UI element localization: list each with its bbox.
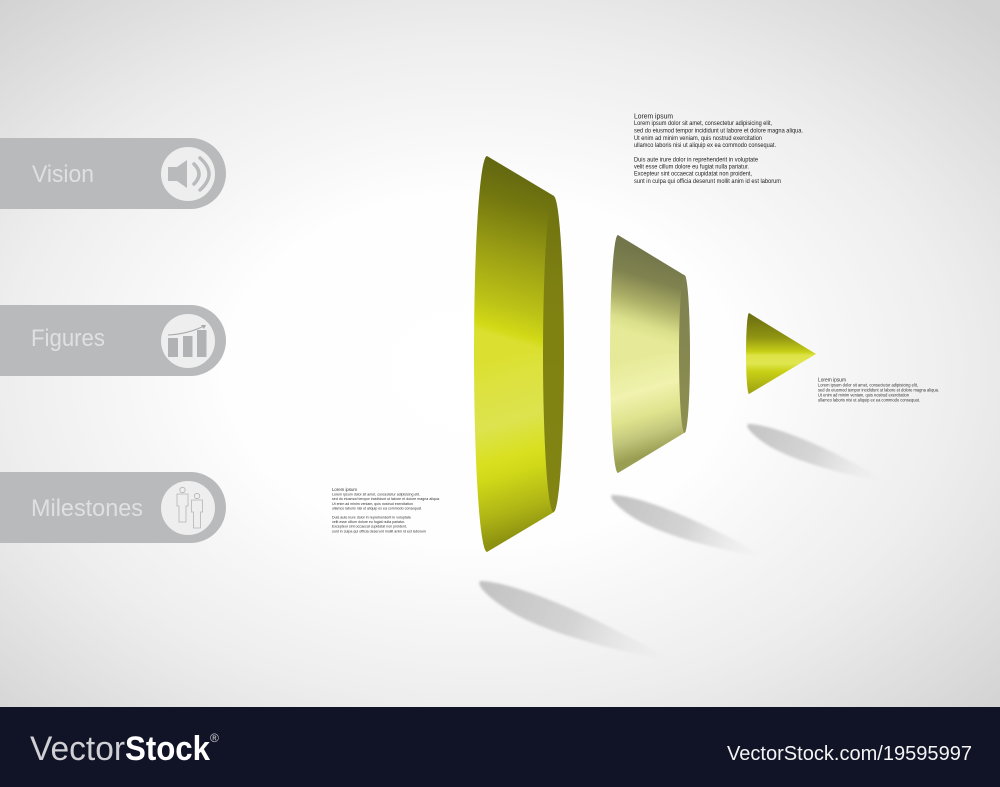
label: Vision: Vision <box>32 161 94 188</box>
text block: right: Lorem ipsum <box>818 378 846 384</box>
label: Vision <box>0 138 226 209</box>
icon: speaker <box>161 147 215 201</box>
text block: left: Lorem ipsum <box>332 487 357 492</box>
registered mark: ® <box>210 731 219 745</box>
label: Figures: Figures <box>31 325 105 352</box>
text block: right: Lorem ipsum dolor sit amet, consectetur adipisicing elit, <box>818 382 918 388</box>
footer banner <box>0 707 1000 787</box>
text block: top <box>634 114 803 185</box>
shadow: middle segment <box>611 495 767 558</box>
text block: left: Ut enim ad minim veniam, quis nostrud exercitation <box>332 501 413 506</box>
large cone segment <box>474 156 564 552</box>
label: Milestones: Milestones <box>31 495 143 522</box>
text block: top: Lorem ipsum dolor sit amet, consectetur adipisicing elit, <box>634 121 772 127</box>
text block: left: sed do eiusmod tempor incididunt ut labore et dolore magna aliqua. <box>332 496 440 501</box>
text block: right: Ut enim ad minim veniam, quis nostrud exercitation <box>818 392 910 398</box>
shadow: large segment <box>479 581 672 661</box>
text block: top: Lorem ipsum <box>634 114 673 120</box>
text block: left <box>332 487 440 534</box>
text block: right: sed do eiusmod tempor incididunt ut labore et dolore magna aliqua. <box>818 388 939 392</box>
middle cone segment <box>610 235 690 473</box>
text block: top: Excepteur sint occaecat cupidatat non proident, <box>634 172 752 178</box>
image id: VectorStock.com/19595997 <box>727 743 972 765</box>
text block: top: Ut enim ad minim veniam, quis nostrud exercitation <box>634 136 762 142</box>
text block: top: sunt in culpa qui officia deserunt mollit anim id est laborum <box>634 179 781 185</box>
text block: left: ullamco laboris nisi ut aliquip ex ea commodo consequat. <box>332 506 422 510</box>
text block: right <box>818 378 939 402</box>
text block: top: sed do eiusmod tempor incididunt ut labore et dolore magna aliqua. <box>634 128 803 134</box>
text block: left: Lorem ipsum dolor sit amet, consectetur adipisicing elit, <box>332 492 420 496</box>
logo: VectorStock: VectorStock <box>30 730 210 768</box>
small cone tip <box>746 313 816 394</box>
text block: left: sunt in culpa qui officia deserunt mollit anim id est laborum <box>332 528 427 534</box>
label: Figures <box>0 305 226 376</box>
text block: top: velit esse cillum dolore eu fugiat nulla pariatur. <box>634 164 749 170</box>
label: Milestones <box>0 472 226 543</box>
text block: left: velit esse cillum dolore eu fugiat nulla pariatur. <box>332 519 405 524</box>
text block: top: ullamco laboris nisi ut aliquip ex ea commodo consequat. <box>634 143 776 149</box>
icon: bar chart <box>161 314 215 368</box>
shadow: small segment <box>747 424 887 482</box>
text block: right: ullamco laboris nisi ut aliquip ex ea commodo consequat. <box>818 398 920 402</box>
icon: people <box>161 481 215 535</box>
text block: left: Excepteur sint occaecat cupidatat non proident, <box>332 524 407 528</box>
text block: left: Duis aute irure dolor in reprehenderit in voluptate <box>332 514 412 520</box>
text block: top: Duis aute irure dolor in reprehenderit in voluptate <box>634 158 759 164</box>
